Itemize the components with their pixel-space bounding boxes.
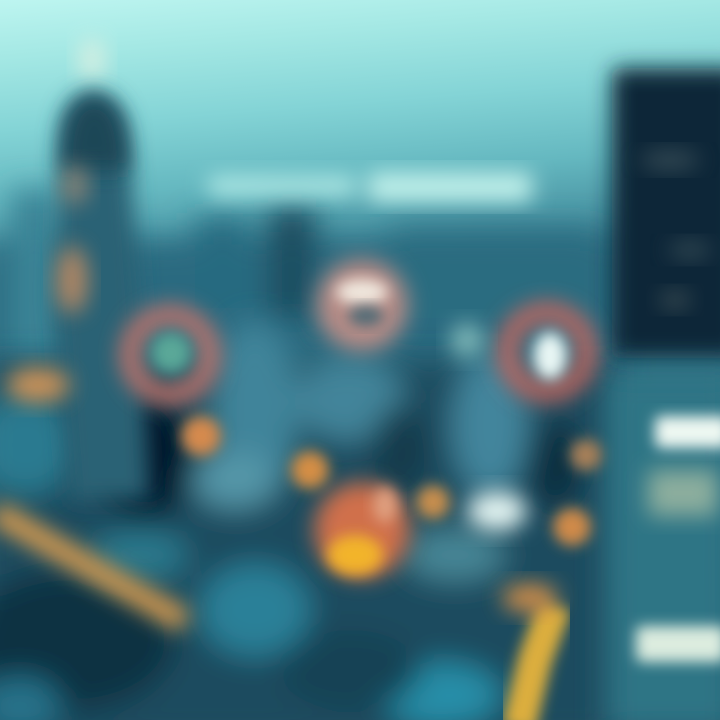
road: left orange bbox=[0, 512, 185, 622]
city mid-ground bbox=[0, 320, 620, 720]
distant skyline bbox=[0, 190, 620, 370]
white highlight bbox=[467, 491, 527, 531]
small orange dots bbox=[181, 416, 602, 546]
circular marker: centre bbox=[316, 259, 408, 351]
tall tower bbox=[6, 38, 150, 500]
road: right yellow bbox=[518, 605, 555, 720]
right light panel bbox=[606, 372, 720, 720]
road end glow bbox=[502, 583, 558, 613]
circular marker: right bbox=[450, 312, 587, 392]
flame marker bbox=[314, 482, 410, 578]
right dark panel bbox=[612, 68, 720, 358]
title placeholder: blurred white bar bbox=[208, 172, 532, 202]
circular marker: left bbox=[130, 315, 210, 395]
